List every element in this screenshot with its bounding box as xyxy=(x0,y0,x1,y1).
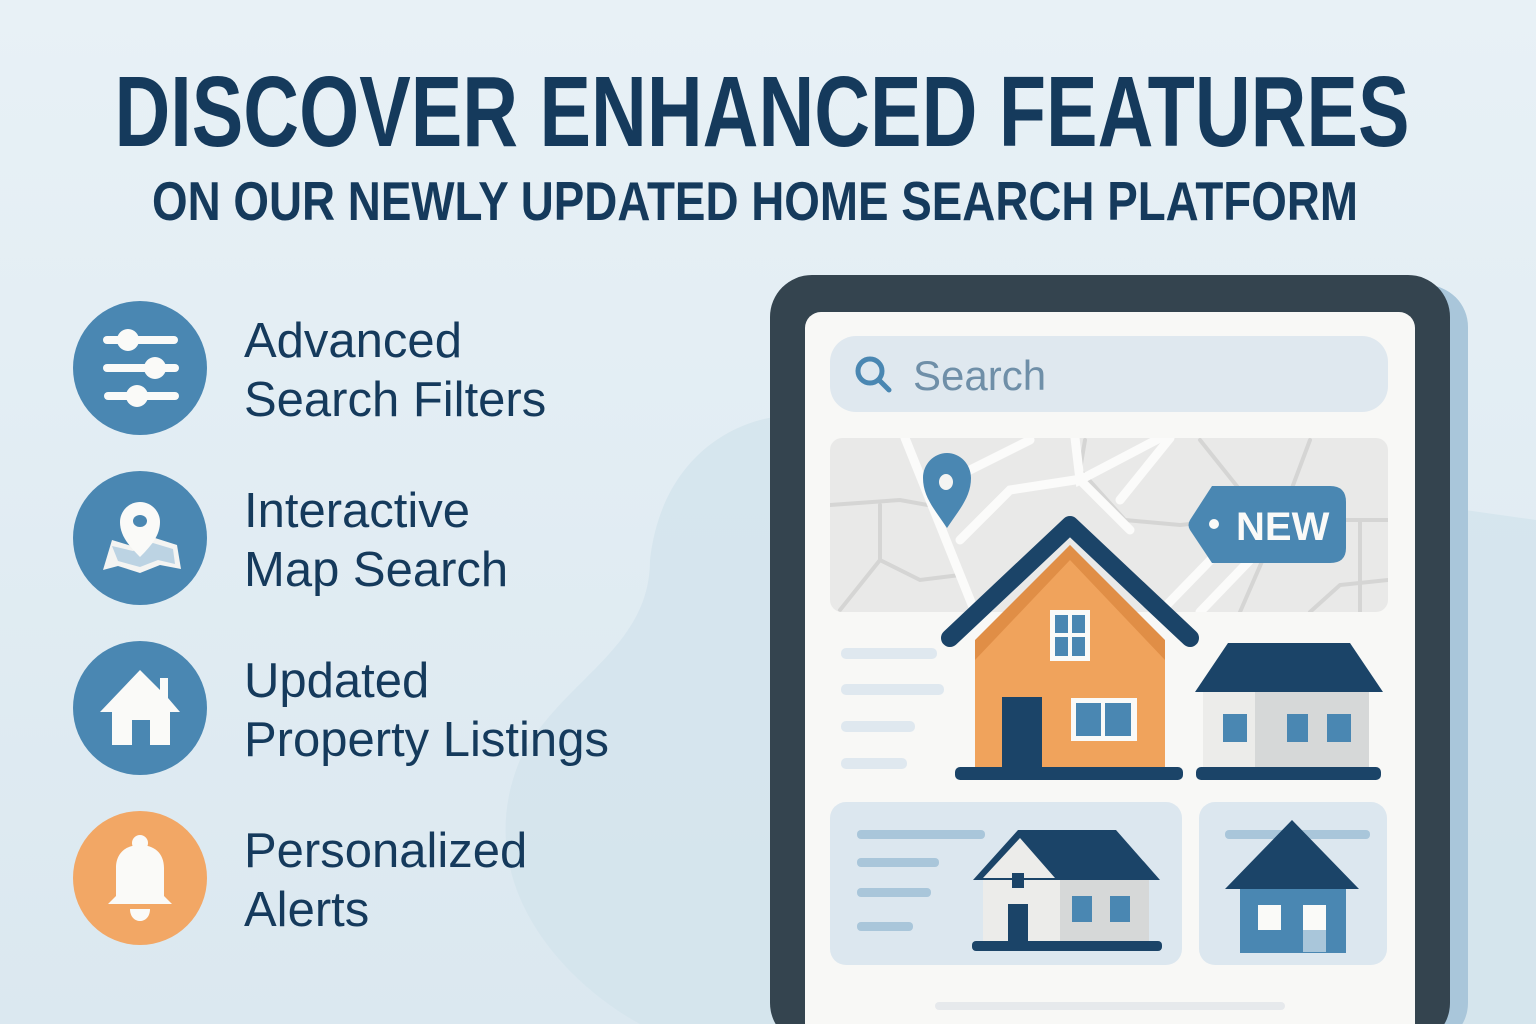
label: Map Search xyxy=(244,543,508,597)
feature: updated property listings xyxy=(73,641,609,775)
search bar: Search xyxy=(913,352,1046,399)
icon: map pin xyxy=(73,471,207,605)
label: Advanced xyxy=(244,314,462,368)
listing card 1 xyxy=(830,802,1182,965)
small house xyxy=(1195,643,1383,780)
search bar xyxy=(830,336,1388,412)
listing card 2 xyxy=(1199,802,1387,965)
label: Personalized xyxy=(244,824,527,878)
label: Alerts xyxy=(244,883,369,937)
icon: house xyxy=(73,641,207,775)
map pin xyxy=(923,453,971,528)
label: Property Listings xyxy=(244,713,609,767)
NEW tag: NEW xyxy=(1236,505,1330,549)
label: Search Filters xyxy=(244,373,546,427)
big orange house xyxy=(950,525,1190,780)
feature: interactive map search xyxy=(73,471,508,605)
label: Updated xyxy=(244,654,429,708)
icon: bell xyxy=(73,811,207,945)
feature: personalized alerts xyxy=(73,811,527,945)
icon: sliders xyxy=(73,301,207,435)
label: Interactive xyxy=(244,484,470,538)
list lines xyxy=(841,648,944,769)
feature: advanced search filters xyxy=(73,301,546,435)
map xyxy=(830,438,1388,612)
tablet xyxy=(770,275,1468,1024)
NEW tag xyxy=(1188,486,1346,563)
